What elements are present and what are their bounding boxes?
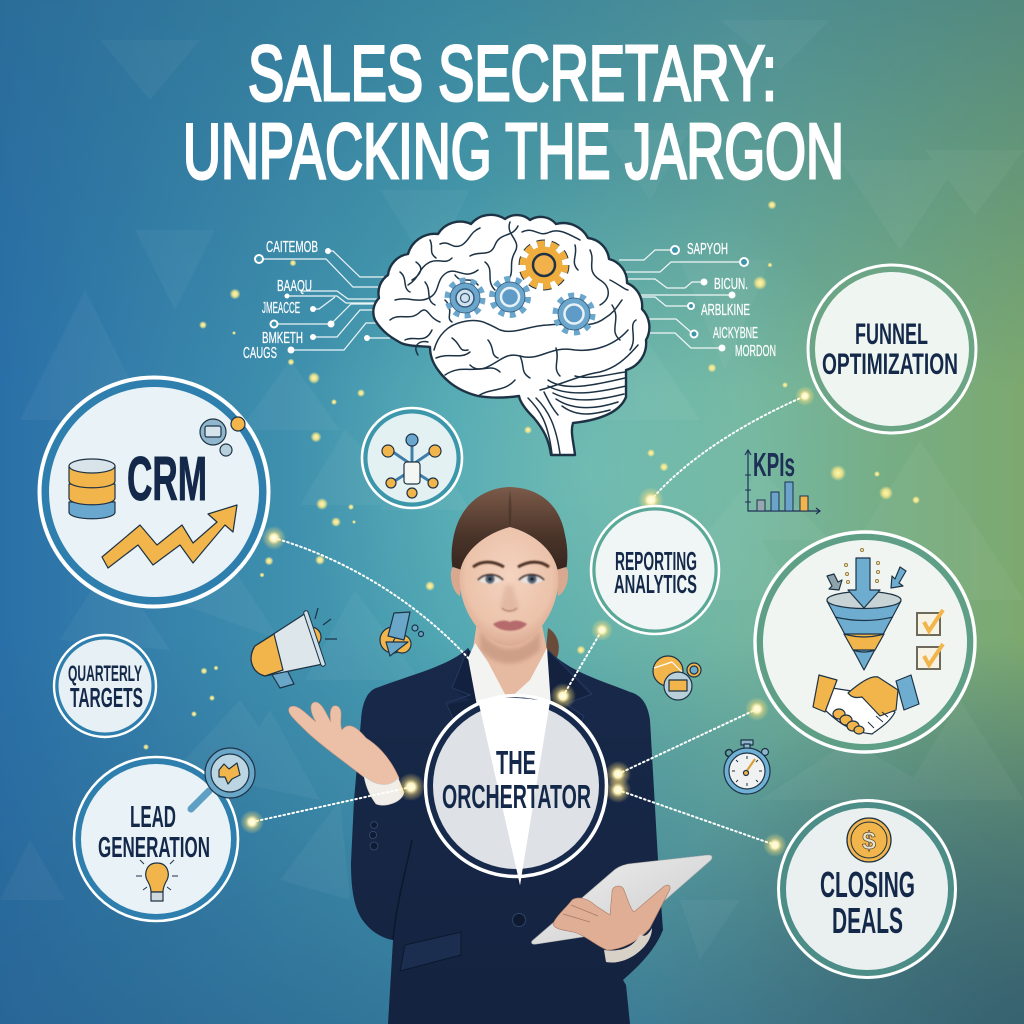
jacket pockets xyxy=(400,932,461,971)
brain circuit labels: JMEACCE xyxy=(262,300,300,317)
icon: light bulb xyxy=(136,860,178,901)
neck xyxy=(472,615,548,705)
shirt xyxy=(468,643,551,885)
panel: reporting analytics xyxy=(591,506,719,634)
panel: closing deals: CLOSING xyxy=(820,864,915,905)
panel: lead generation xyxy=(74,748,255,921)
brain folds xyxy=(390,222,638,454)
icon: database xyxy=(69,459,115,519)
brain circuit labels: BMKETH xyxy=(262,330,303,347)
panel: funnel optimization: FUNNEL xyxy=(855,318,928,351)
central circle xyxy=(426,696,606,885)
panel: closing deals: DEALS xyxy=(832,900,903,941)
icon: network xyxy=(382,434,441,498)
eyes and brows xyxy=(473,562,549,584)
brain xyxy=(243,215,776,455)
panel: lead generation: GENERATION xyxy=(98,832,210,864)
person xyxy=(289,487,712,1024)
jacket button xyxy=(512,914,526,926)
icon: report badges xyxy=(653,656,701,700)
brain circuit labels: ARBLKINE xyxy=(701,302,750,319)
icon: device badges xyxy=(200,417,245,456)
panel: quarterly targets: QUARTERLY xyxy=(68,661,142,686)
icon: growth arrow xyxy=(102,505,237,568)
central circle text: THE xyxy=(496,744,536,781)
panel: network icon circle xyxy=(362,408,462,508)
brain circuit traces xyxy=(255,246,748,354)
brain circuit labels: CAUGS xyxy=(243,345,277,362)
gear: blue right xyxy=(556,296,592,332)
ears xyxy=(451,567,568,596)
panel: funnel and handshake xyxy=(755,532,975,752)
ponytail xyxy=(546,628,559,660)
chart: KPIs: KPIs xyxy=(753,446,795,483)
nose xyxy=(501,585,518,611)
panel: reporting analytics: REPORTING xyxy=(615,546,697,576)
chart: KPIs xyxy=(745,446,820,514)
icon: megaphone xyxy=(251,608,337,688)
hair xyxy=(452,487,567,584)
gear: blue centre xyxy=(493,280,527,314)
brain circuit labels: SAPYOH xyxy=(687,241,728,258)
brain circuit labels: BICUN. xyxy=(714,276,748,293)
central circle text: ORCHERTATOR xyxy=(442,778,591,815)
panel: funnel optimization xyxy=(808,265,976,433)
icon: handshake xyxy=(813,675,919,734)
brain circuit labels: CAITEMOB xyxy=(266,239,318,256)
lips xyxy=(493,621,527,631)
icon: dollar coin: $ xyxy=(862,827,876,855)
brain outline xyxy=(373,215,649,455)
title: SALES SECRETARY: xyxy=(248,29,777,117)
gear: gold xyxy=(524,245,564,285)
brain circuit labels xyxy=(243,239,776,362)
face xyxy=(460,527,558,646)
icon: funnel xyxy=(827,592,901,670)
CRM heading: CRM xyxy=(127,445,207,514)
brain circuit labels: BAAQU xyxy=(277,278,312,295)
right cuff xyxy=(604,928,652,963)
icon: magnifier xyxy=(191,748,255,809)
sparkles xyxy=(143,200,920,750)
panel: CRM xyxy=(40,378,268,606)
icon: checkboxes xyxy=(917,610,943,669)
jacket xyxy=(351,648,663,1024)
icon: stopwatch xyxy=(724,740,770,794)
sleeve buttons xyxy=(369,822,378,850)
panel: quarterly targets: TARGETS xyxy=(70,682,143,713)
gear: blue left xyxy=(448,282,482,314)
left hand xyxy=(289,702,404,805)
right hand xyxy=(553,885,670,963)
tablet xyxy=(532,855,712,944)
left cuff xyxy=(364,776,404,805)
title xyxy=(183,29,844,195)
brain circuit labels: AICKYBNE xyxy=(713,325,758,342)
dotted connector lines xyxy=(252,396,805,845)
icon: dollar coin xyxy=(847,818,891,862)
cerebellum lines xyxy=(548,372,626,414)
hair part shading xyxy=(508,490,512,527)
panel: lead generation: LEAD xyxy=(130,799,176,834)
neck shadow xyxy=(480,630,540,664)
glow nodes xyxy=(240,386,815,857)
panel: reporting analytics: ANALYTICS xyxy=(614,569,697,599)
central circle text xyxy=(442,744,591,815)
brain circuit labels: MORDON xyxy=(735,343,776,360)
panel: quarterly targets xyxy=(54,635,156,737)
icon: funnel arrows xyxy=(827,548,906,608)
panel: closing deals xyxy=(778,800,956,978)
icon: small tool badge xyxy=(380,612,424,656)
